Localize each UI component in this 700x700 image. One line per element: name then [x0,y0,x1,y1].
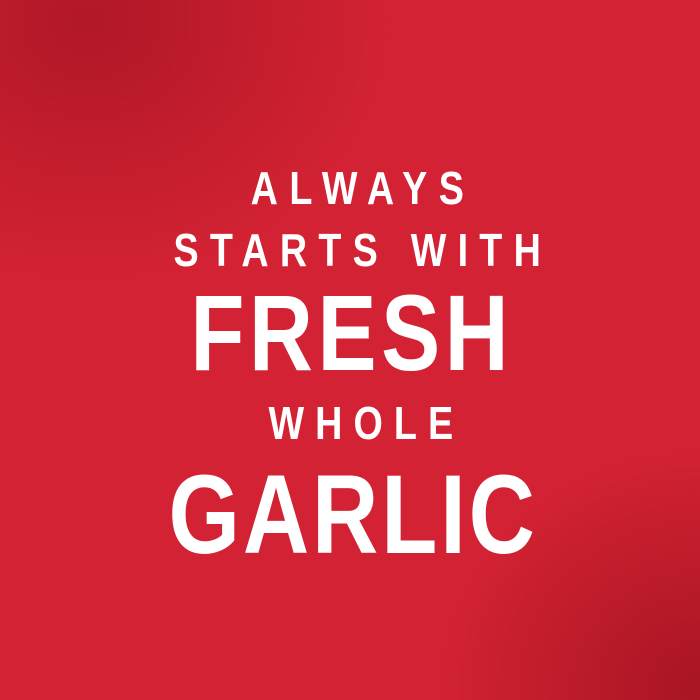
line: WHOLE: WHOLE [268,397,464,449]
line: ALWAYS: ALWAYS [251,162,475,214]
line: FRESH: FRESH [191,272,513,393]
line: GARLIC: GARLIC [168,452,538,577]
line: STARTS WITH: STARTS WITH [174,224,552,276]
